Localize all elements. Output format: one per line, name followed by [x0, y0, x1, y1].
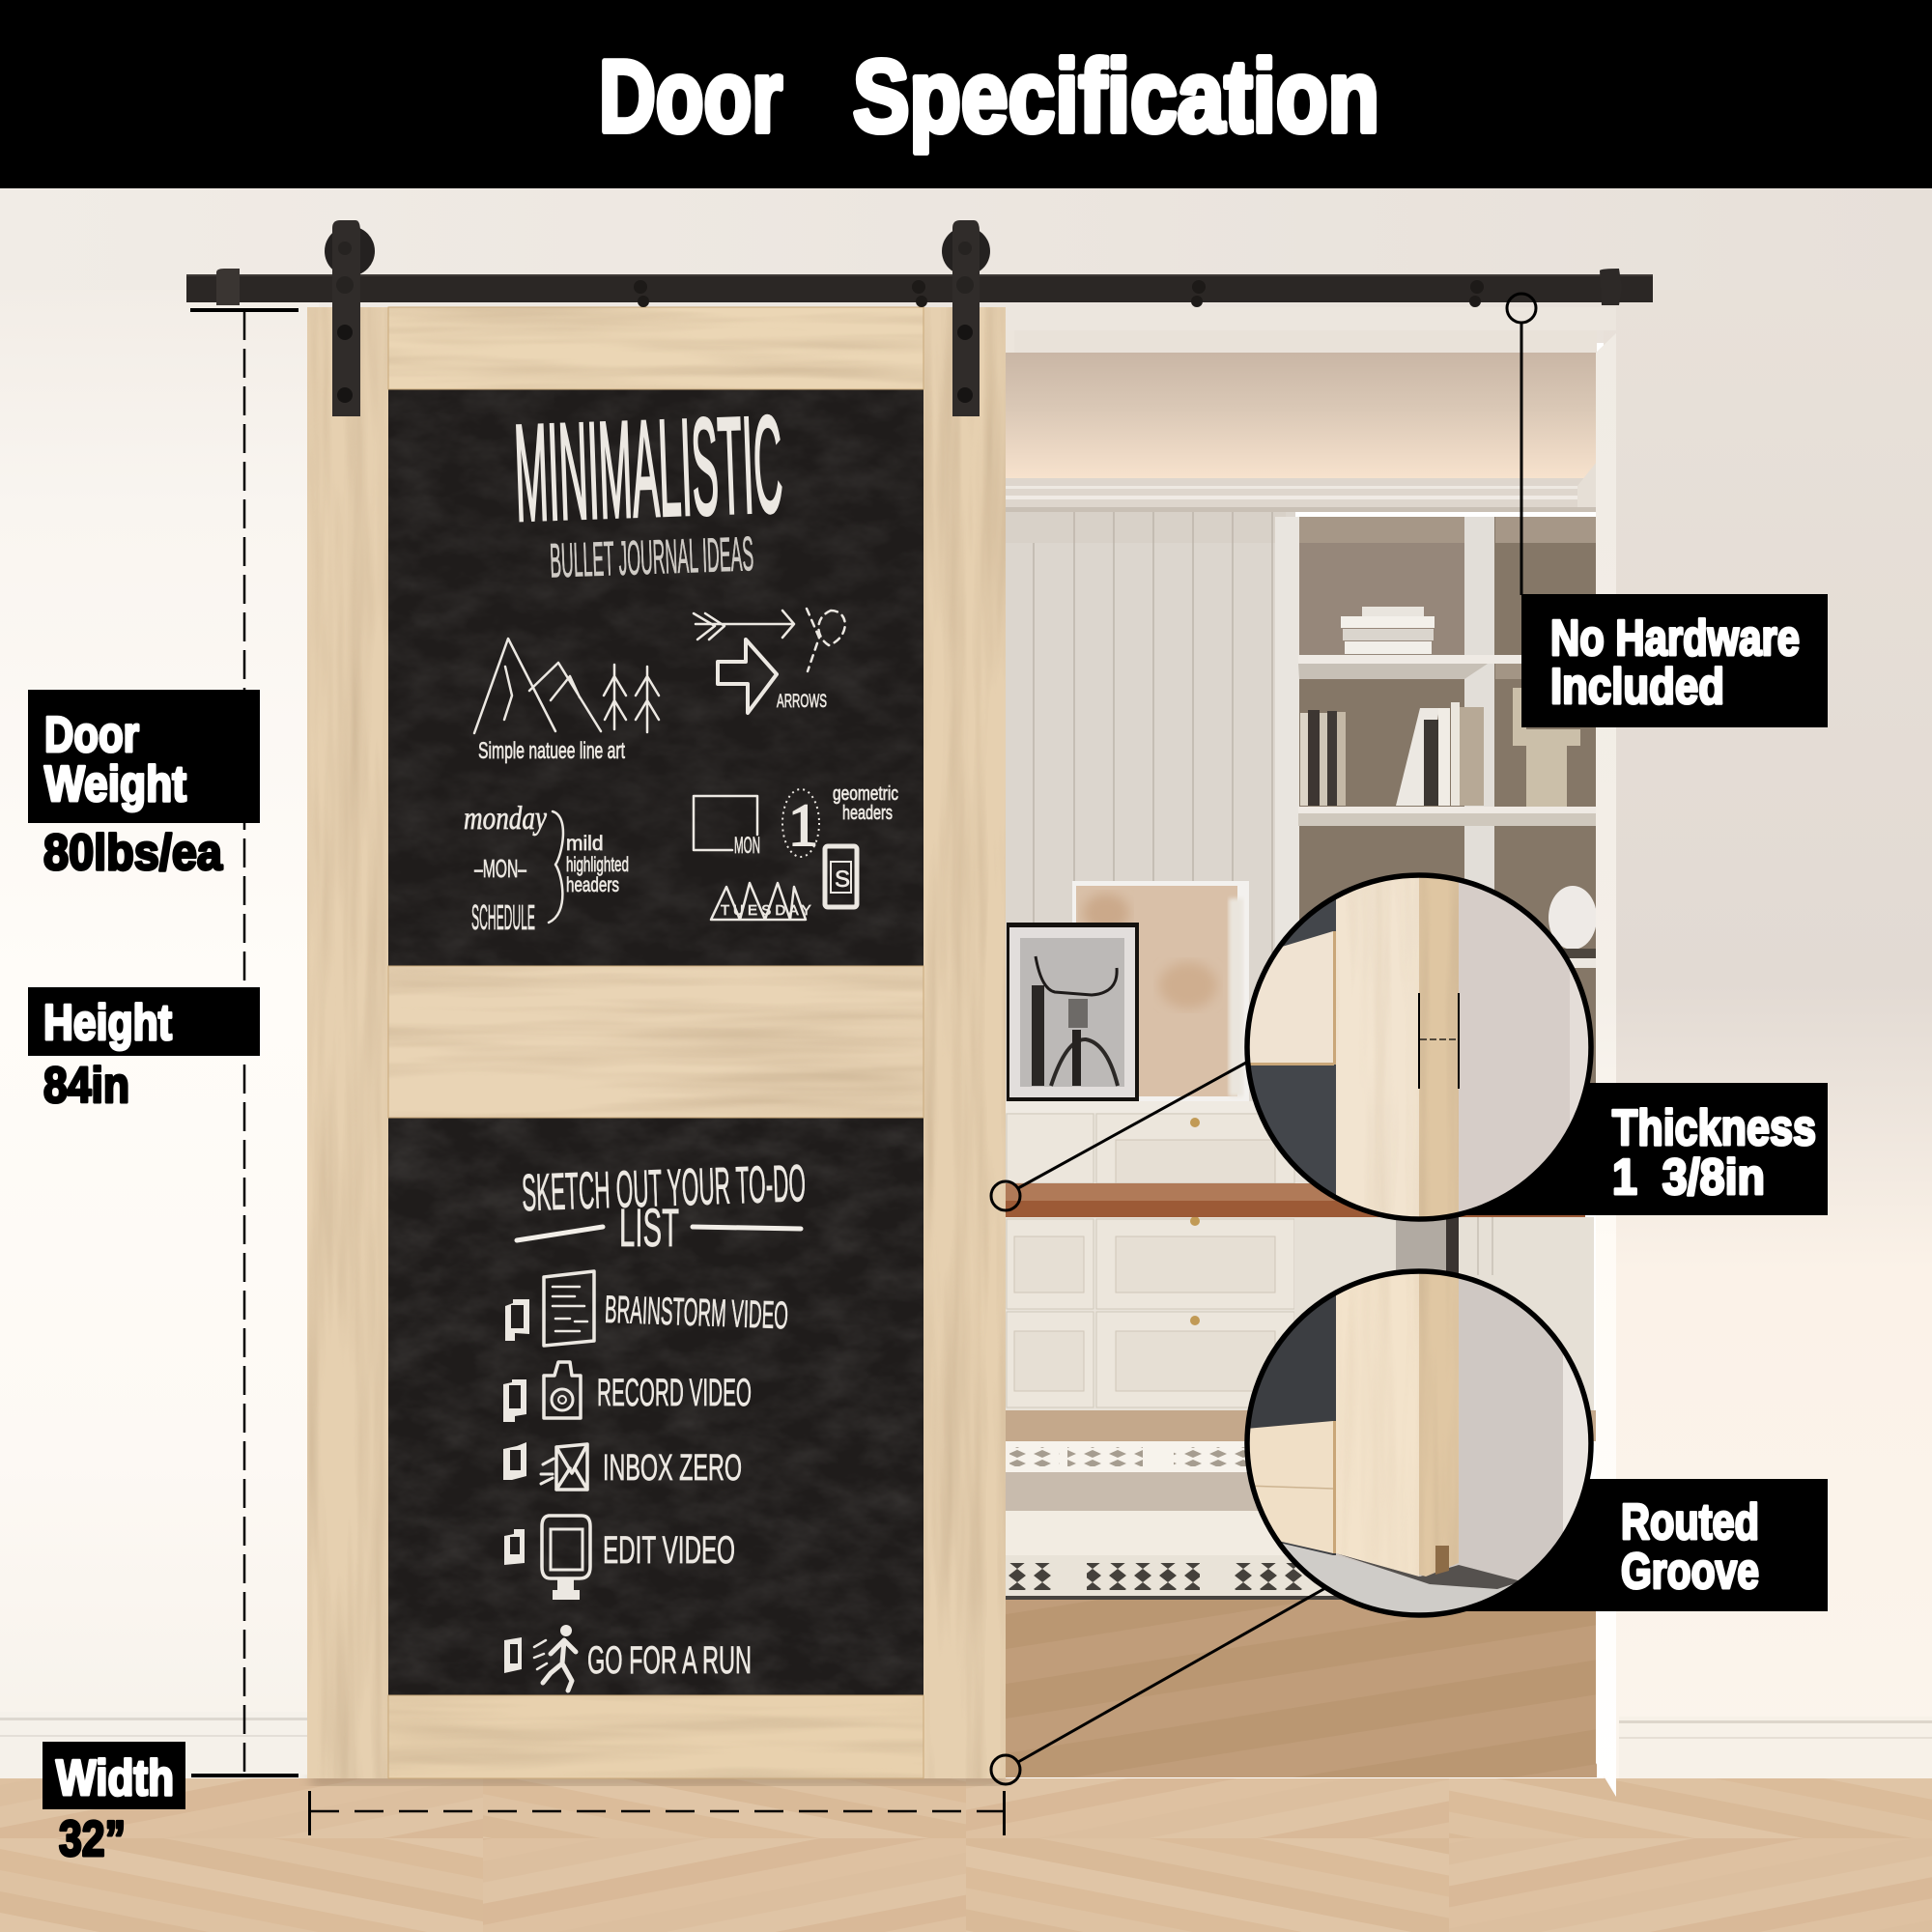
sculpture — [1513, 688, 1580, 807]
ceiling — [1006, 330, 1597, 480]
chalk geometric headers: T U E S D A Y — [721, 902, 811, 919]
crown moulding — [1006, 462, 1597, 512]
chalk drawing: minimalistic bullet journal — [464, 387, 898, 937]
chalk drawing: to-do list: BRAINSTORM VIDEO — [604, 1289, 789, 1337]
baseboards — [0, 1712, 1932, 1778]
chalk geometric headers: S — [835, 867, 850, 893]
no hardware label: Included — [1550, 659, 1724, 715]
detail circle: thickness — [1244, 872, 1594, 1222]
top rail — [388, 307, 923, 389]
LIST heading — [517, 1197, 801, 1258]
row: record video — [503, 1362, 752, 1422]
door weight label — [28, 690, 260, 823]
chalk highlighted headers: headers — [566, 874, 619, 896]
row: brainstorm video — [505, 1271, 789, 1346]
chalk geometric headers: headers — [842, 803, 893, 824]
chalk mountains — [474, 639, 659, 764]
left stile — [307, 307, 389, 1778]
title: Door — [599, 40, 782, 154]
width dimension line — [308, 1791, 1006, 1835]
rail bolts — [634, 280, 1484, 307]
chalk highlighted headers: monday — [464, 801, 548, 837]
chalk drawing: to-do list — [503, 1154, 807, 1690]
rug — [1006, 1410, 1597, 1600]
chalk geometric headers — [694, 783, 898, 920]
LIST heading: LIST — [619, 1197, 679, 1258]
door shadow — [311, 1776, 1003, 1785]
framed art: watercolour — [1072, 881, 1249, 1101]
chalk highlighted headers — [464, 801, 629, 937]
width value: 32” — [59, 1811, 126, 1867]
detail circle: routed groove — [1236, 1265, 1606, 1633]
door weight label: Weight — [44, 756, 186, 812]
leader: thickness — [991, 1063, 1246, 1210]
lower chalkboard panel — [388, 1117, 923, 1696]
text: MINIMALISTIC — [512, 387, 785, 551]
height value: 84in — [43, 1058, 129, 1114]
right stopper — [1600, 269, 1622, 305]
cabinets — [1006, 1101, 1594, 1410]
room seen through opening — [1006, 330, 1598, 1777]
routed groove label: Groove — [1621, 1544, 1759, 1600]
row: inbox zero — [503, 1442, 742, 1490]
chalk highlighted headers: highlighted — [566, 854, 629, 876]
chalk geometric headers: 1 — [788, 793, 818, 859]
row: inbox zero: INBOX ZERO — [603, 1448, 742, 1489]
thickness label: Thickness — [1612, 1100, 1816, 1156]
right hanger strap — [942, 220, 990, 416]
row: go for a run — [504, 1625, 752, 1690]
row: edit video: EDIT VIDEO — [603, 1529, 735, 1572]
stacked books — [1341, 607, 1435, 654]
chalk geometric headers: MON — [734, 833, 760, 859]
height label — [28, 987, 260, 1056]
chalk highlighted headers: mild — [566, 833, 604, 855]
herringbone floor — [0, 1778, 1932, 1932]
left stopper — [216, 269, 240, 305]
title — [599, 40, 1379, 154]
chalk highlighted headers: –MON– — [474, 854, 526, 883]
chalk drawing: minimalistic bullet journal: BULLET JOURNAL IDEAS — [549, 526, 754, 588]
chalk arrows: ARROWS — [777, 692, 827, 712]
barn door — [307, 307, 1006, 1785]
chalk geometric headers: geometric — [833, 783, 898, 805]
rug diamonds — [1006, 1447, 1302, 1590]
upper chalkboard panel — [388, 389, 923, 967]
chalk highlighted headers: SCHEDULE — [471, 897, 535, 937]
width label: Width — [56, 1750, 174, 1806]
left hanger strap — [325, 220, 375, 416]
door jamb — [1006, 307, 1616, 1797]
title banner — [0, 0, 1932, 188]
bottom rail — [388, 1695, 923, 1778]
height dimension line — [190, 308, 298, 1777]
upright books — [1300, 702, 1484, 806]
framed art: bicycle photo — [1007, 923, 1139, 1101]
routed groove label — [1459, 1479, 1828, 1611]
thickness ticks — [1418, 993, 1460, 1089]
white vase — [1495, 886, 1597, 968]
door weight label: Door — [44, 707, 139, 763]
right stile — [923, 307, 1006, 1778]
bookcase — [1275, 517, 1598, 1121]
chalk mountains: Simple natuee line art — [478, 738, 625, 764]
no hardware label: No Hardware — [1550, 611, 1800, 667]
row: go for a run: GO FOR A RUN — [587, 1639, 752, 1682]
row: edit video — [504, 1516, 735, 1600]
title: Specification — [853, 40, 1379, 154]
leader: no hardware — [1507, 294, 1536, 595]
thickness label — [1459, 1083, 1828, 1215]
row: record video: RECORD VIDEO — [597, 1372, 752, 1414]
text: SKETCH OUT YOUR TO-DO — [521, 1154, 807, 1222]
sliding track rail — [186, 269, 1653, 307]
panelled wall — [1006, 507, 1295, 1125]
interior floor — [1006, 1600, 1597, 1777]
no hardware label — [1521, 594, 1828, 727]
thickness label: 1 3/8in — [1612, 1150, 1765, 1206]
leader: routed groove — [991, 1588, 1325, 1784]
height label: Height — [43, 995, 172, 1051]
door weight value: 80lbs/ea — [43, 825, 223, 881]
middle rail — [388, 966, 923, 1118]
routed groove label: Routed — [1621, 1494, 1759, 1550]
wood shelf — [1006, 1183, 1585, 1217]
chalk arrows — [694, 609, 845, 713]
